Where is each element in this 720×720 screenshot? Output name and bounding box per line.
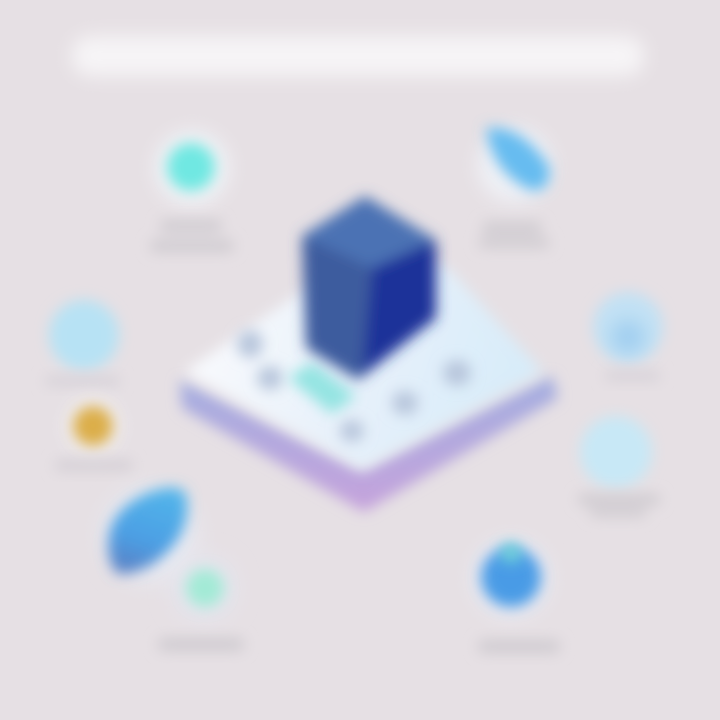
icon: left gold circle	[55, 396, 133, 471]
platform side edge	[180, 376, 558, 512]
icon: right pale circle	[578, 416, 660, 517]
label	[478, 640, 560, 653]
central cube	[302, 196, 436, 380]
icon: lower left blue hexagon	[104, 487, 196, 581]
platform keys	[237, 330, 471, 442]
label	[158, 638, 244, 651]
icon: right light-blue circle	[593, 292, 663, 381]
label	[55, 460, 133, 471]
platform top	[184, 245, 543, 470]
icon: lower mint circle	[158, 558, 244, 651]
label	[150, 220, 234, 252]
icon: bottom right blue circle	[471, 538, 560, 653]
label	[605, 371, 660, 381]
central platform	[180, 245, 558, 512]
label	[578, 494, 660, 517]
icon: top right blue leaf	[477, 127, 553, 248]
label	[478, 222, 550, 248]
icon: top left teal circle	[150, 130, 234, 252]
title	[72, 36, 644, 76]
teal key	[288, 362, 356, 414]
icon: left light-blue circle	[45, 300, 120, 386]
label	[45, 376, 120, 386]
